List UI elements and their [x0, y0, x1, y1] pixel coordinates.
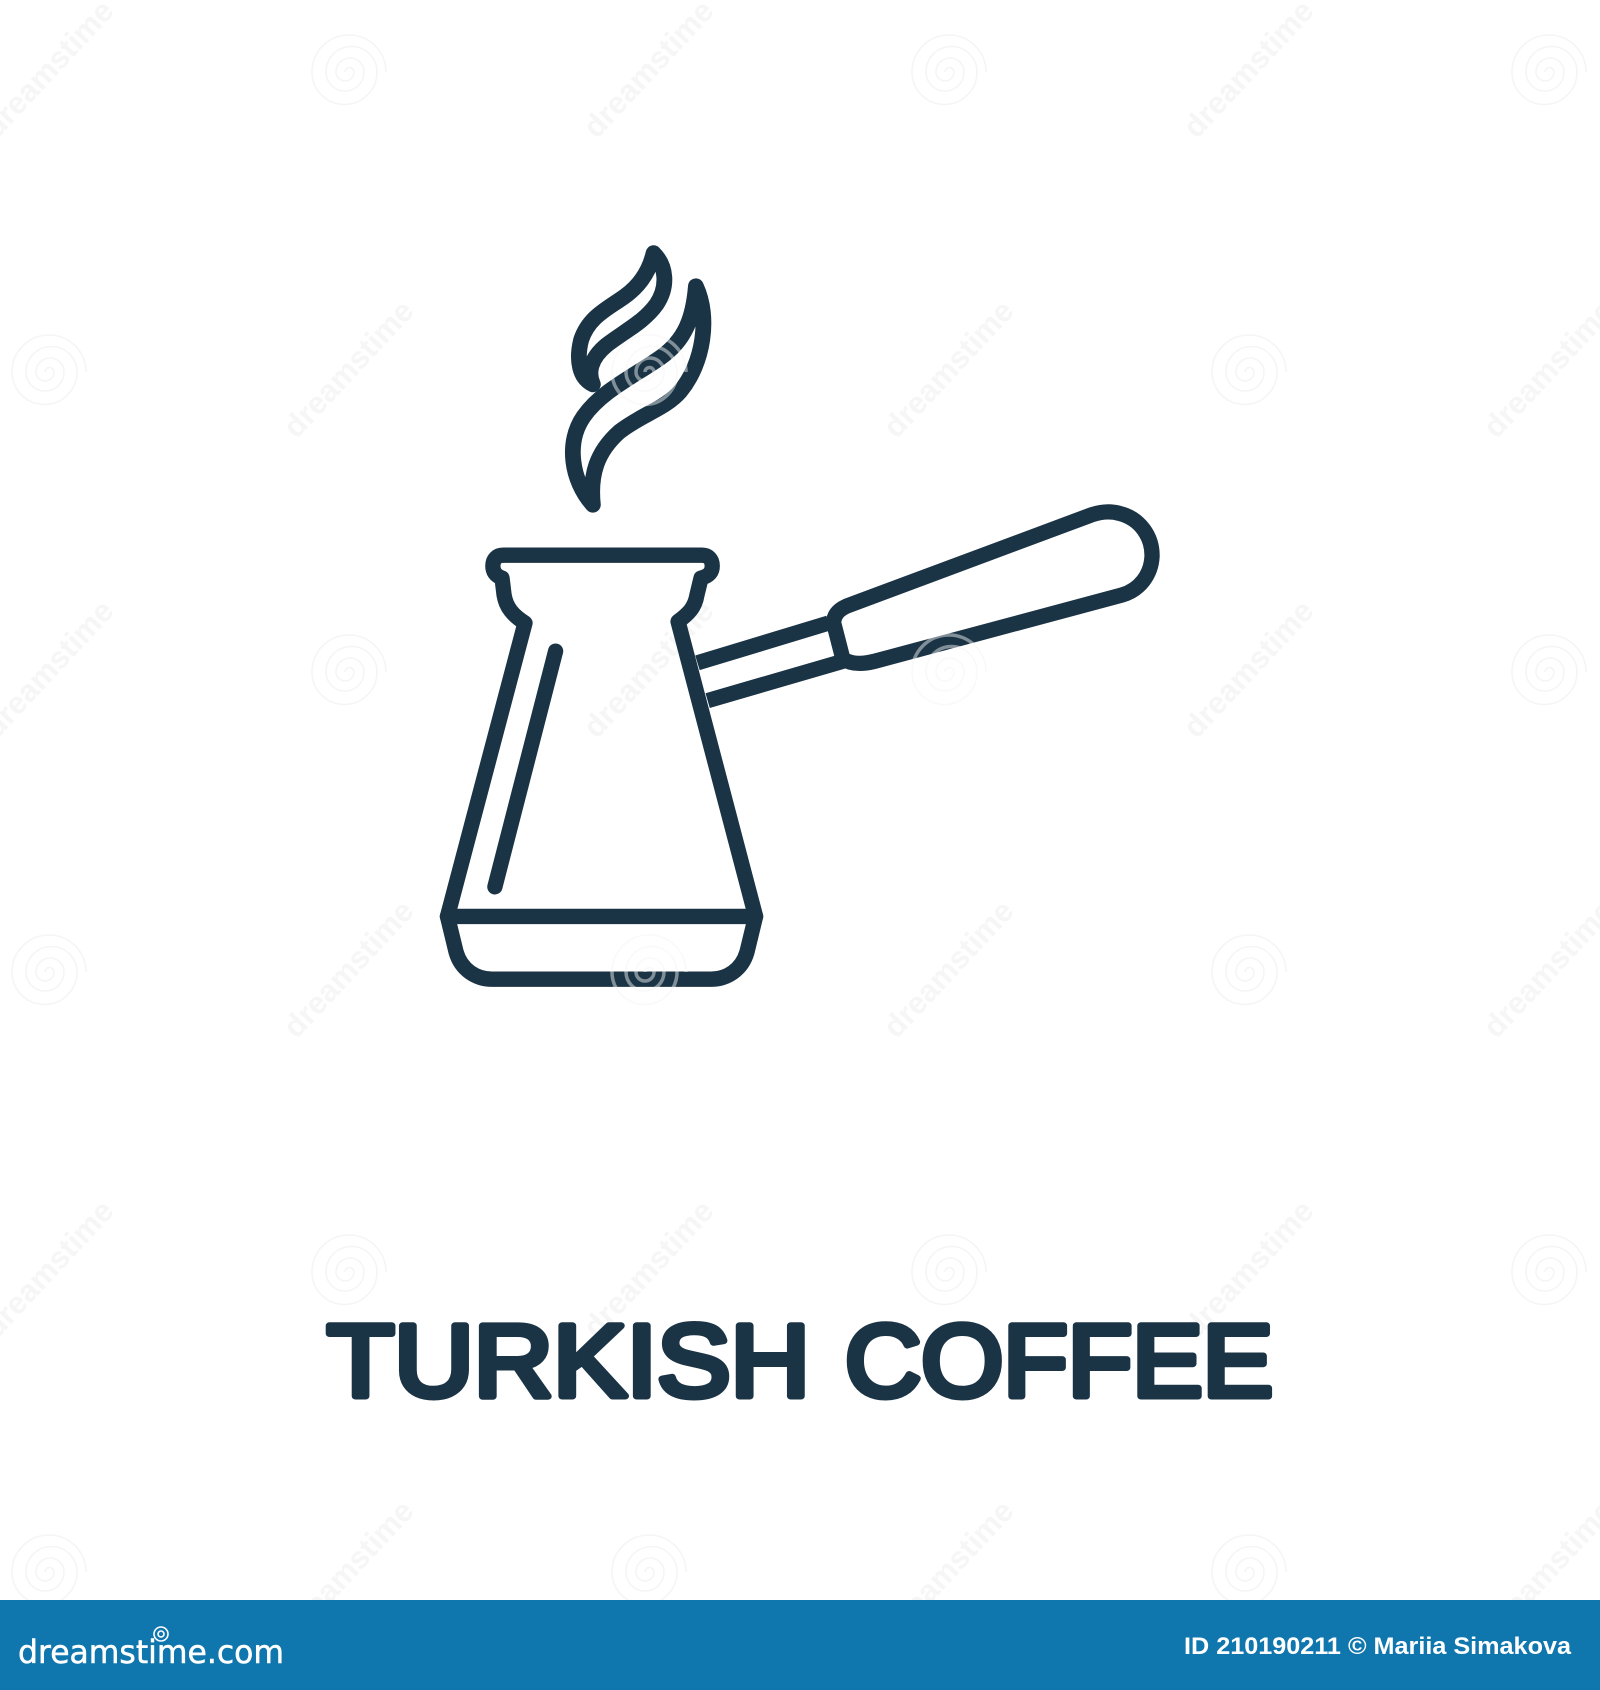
footer logo wordmark: dreamstime.com [18, 1633, 284, 1671]
title: COFFEE [845, 1304, 1273, 1418]
text: dreamstime [276, 1493, 420, 1644]
title [327, 1304, 1273, 1418]
text: dreamstime [276, 293, 420, 444]
icon: turkish coffee pot with steam [447, 253, 1152, 979]
icon: pot highlight line [495, 651, 556, 887]
icon: handle grip [834, 512, 1152, 663]
text: dreamstime [876, 893, 1020, 1044]
icon: upper steam wisp [579, 253, 664, 384]
footer logo spiral [154, 1627, 168, 1641]
text: dreamstime [276, 893, 420, 1044]
footer bar [0, 1600, 1600, 1690]
text: dreamstime [1176, 593, 1320, 744]
title: TURKISH [327, 1304, 810, 1418]
icon: handle connector rod [697, 623, 843, 701]
icon: lower steam wisp [573, 286, 703, 505]
text: dreamstime [576, 593, 720, 744]
text: dreamstime [876, 293, 1020, 444]
text: dreamstime [1176, 1193, 1320, 1344]
text: dreamstime [876, 1493, 1020, 1644]
icon: pot base band [447, 901, 756, 931]
footer image id and author credit: ID 210190211 © Mariia Simakova [1184, 1633, 1572, 1660]
text: dreamstime [576, 1193, 720, 1344]
icon: pot body [447, 555, 756, 979]
